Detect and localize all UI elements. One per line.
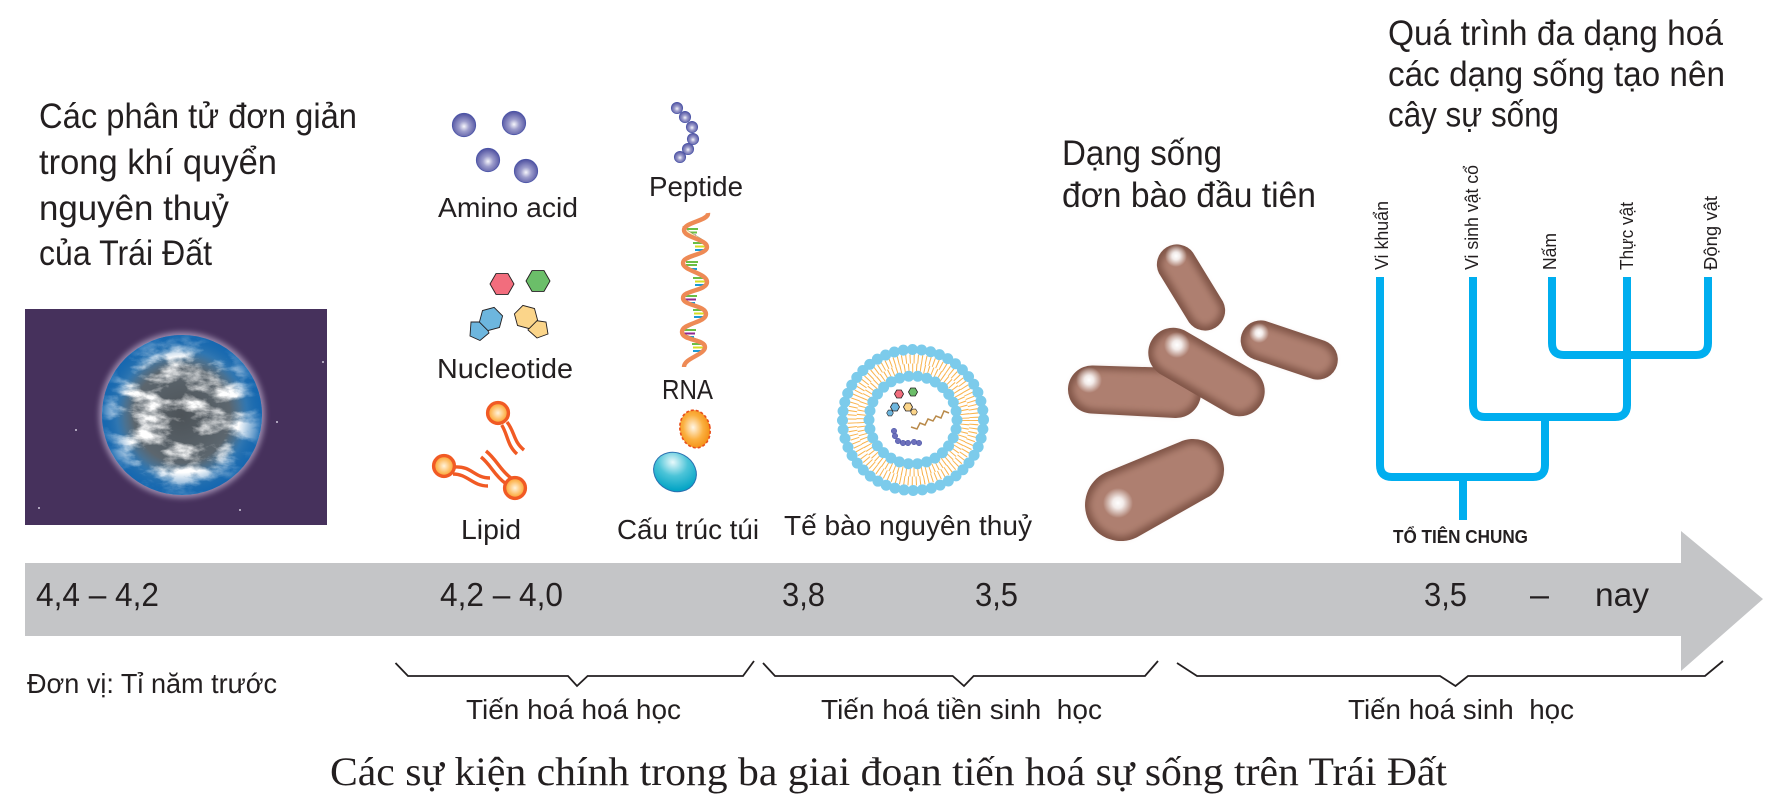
heading: diversification creates tree of life (1388, 14, 1725, 134)
heading: diversification creates tree of life: cây sự sống (1388, 96, 1559, 134)
picture: Earth in space (25, 309, 327, 525)
label: amino acid: Amino acid (438, 192, 578, 223)
timeline values (36, 576, 1649, 613)
caption: Các sự kiện chính trong ba giai đoạn tiến hoá sự sống trên Trái Đất (330, 749, 1447, 794)
brace: prebiotic evolution (763, 661, 1158, 686)
heading: diversification creates tree of life: các dạng sống tạo nên (1388, 55, 1725, 94)
panel: protocell (784, 350, 1032, 541)
phase: prebiotic evolution (763, 661, 1158, 725)
heading: simple molecules in early atmosphere (39, 97, 357, 273)
label: archaea: Vi sinh vật cổ (1461, 165, 1482, 270)
timeline values: 4,4 – 4,2 (36, 576, 159, 613)
icon: amino acid spheres (452, 111, 538, 183)
timeline values: 3,5 (1424, 576, 1467, 613)
heading: first single-celled life: đơn bào đầu tiên (1062, 176, 1316, 215)
label: nucleotide: Nucleotide (437, 353, 573, 384)
label: vesicle structure: Cấu trúc túi (617, 514, 759, 545)
brace: chemical evolution (396, 661, 754, 686)
icon: peptide chain (671, 102, 699, 163)
chart: phylogenetic tree (1380, 277, 1708, 520)
phase: chemical evolution (396, 661, 754, 725)
icon: RNA helix (682, 213, 708, 367)
panel: tree of life (1371, 14, 1725, 547)
timeline arrow (25, 531, 1763, 671)
panel: nucleotide (437, 271, 573, 384)
label: biological evolution: Tiến hoá sinh học (1348, 694, 1574, 725)
label: chemical evolution: Tiến hoá hoá học (466, 694, 681, 725)
icon: nucleotide rings (470, 271, 550, 340)
label: fungi: Nấm (1539, 233, 1560, 270)
timeline values: – (1530, 576, 1550, 613)
phase: biological evolution (1177, 661, 1723, 725)
label: protocell: Tế bào nguyên thuỷ (784, 510, 1032, 541)
panel: lipid (434, 403, 525, 545)
icon: lipid molecules (434, 403, 525, 498)
icon: orange vesicle (676, 407, 714, 451)
icon: protocell membrane (842, 350, 984, 490)
label: animals: Động vật (1700, 196, 1721, 270)
icon: rod-shaped cells (1068, 244, 1338, 541)
heading: simple molecules in early atmosphere: của Trái Đất (39, 234, 212, 273)
label: prebiotic evolution: Tiến hoá tiền sinh học (821, 694, 1102, 725)
panel: peptide (649, 102, 743, 202)
timeline values: nay (1595, 576, 1649, 613)
label: plants: Thực vật (1616, 202, 1637, 270)
panel: amino acid (438, 111, 578, 223)
panel: RNA (662, 213, 713, 405)
label: common ancestor: TỔ TIÊN CHUNG (1393, 526, 1528, 547)
brace: biological evolution (1177, 661, 1723, 686)
icon: blue vesicle (647, 445, 703, 499)
timeline values: 4,2 – 4,0 (440, 576, 563, 613)
label: bacteria: Vi khuẩn (1371, 201, 1392, 270)
heading: first single-celled life: Dạng sống (1062, 134, 1222, 173)
panel: vesicles (617, 407, 759, 545)
label: RNA: RNA (662, 374, 713, 405)
heading: diversification creates tree of life: Quá trình đa dạng hoá (1388, 14, 1724, 53)
icon: protocell contents (887, 388, 949, 446)
timeline values: 3,5 (975, 576, 1018, 613)
label: peptide: Peptide (649, 171, 743, 202)
heading: simple molecules in early atmosphere: Các phân tử đơn giản (39, 97, 357, 136)
heading: simple molecules in early atmosphere: trong khí quyển (39, 143, 277, 182)
timeline values: 3,8 (782, 576, 825, 613)
heading: simple molecules in early atmosphere: nguyên thuỷ (39, 189, 229, 228)
panel: first single-celled life (1062, 134, 1338, 541)
unit note: Đơn vị: Tỉ năm trước (27, 668, 277, 699)
panel: early Earth (25, 97, 357, 525)
heading: first single-celled life (1062, 134, 1316, 215)
label: lipid: Lipid (461, 514, 521, 545)
